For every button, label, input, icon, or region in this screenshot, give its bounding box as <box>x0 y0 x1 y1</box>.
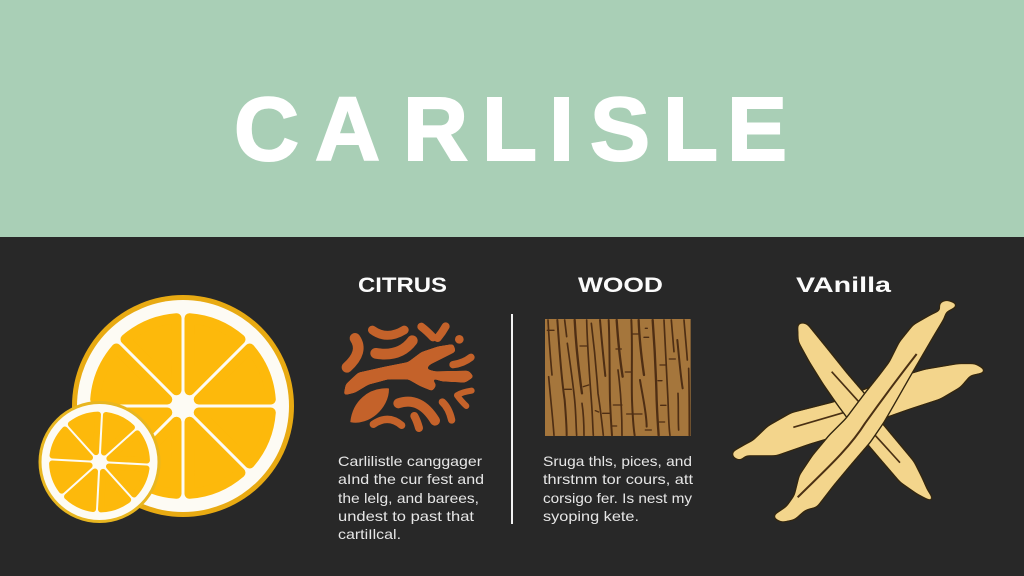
heading: wood: WOOD <box>578 273 663 297</box>
icon: small citrus slice <box>38 401 160 523</box>
icon: citrus slices <box>38 295 294 523</box>
vanilla bean: horizontal <box>732 364 987 460</box>
icon: large citrus slice <box>72 295 294 517</box>
icon: crossed vanilla beans <box>732 301 987 522</box>
text block: wood description <box>543 453 693 524</box>
icon: orange squiggle pattern <box>344 326 473 428</box>
text block: wood description: Sruga thls, pices, and <box>543 453 692 469</box>
heading: citrus: CITRUS <box>358 273 447 297</box>
text block: citrus description: Carlilistle canggager <box>338 453 482 469</box>
panel: title banner <box>0 0 1024 237</box>
panel: dark lower section <box>0 237 1024 576</box>
text block: wood description: thrstnm tor cours, att <box>543 471 693 487</box>
text block: wood description: syoping kete. <box>543 508 639 524</box>
heading: vanilla: VAnilla <box>796 273 892 297</box>
title: CARLISLE <box>234 80 787 180</box>
text block: citrus description: aInd the cur fest and <box>338 471 484 487</box>
text block: citrus description: the lelg, and barees, <box>338 490 479 506</box>
text block: citrus description <box>338 453 484 542</box>
icon: wood grain texture <box>545 319 691 436</box>
text block: citrus description: cartiIlcal. <box>338 526 401 542</box>
divider <box>511 314 513 524</box>
vanilla bean: diagonal up <box>773 301 958 522</box>
text block: citrus description: undest to past that <box>338 508 474 524</box>
vanilla bean: diagonal down <box>798 323 935 503</box>
text block: wood description: corsigo fer. Is nest my <box>543 490 692 506</box>
